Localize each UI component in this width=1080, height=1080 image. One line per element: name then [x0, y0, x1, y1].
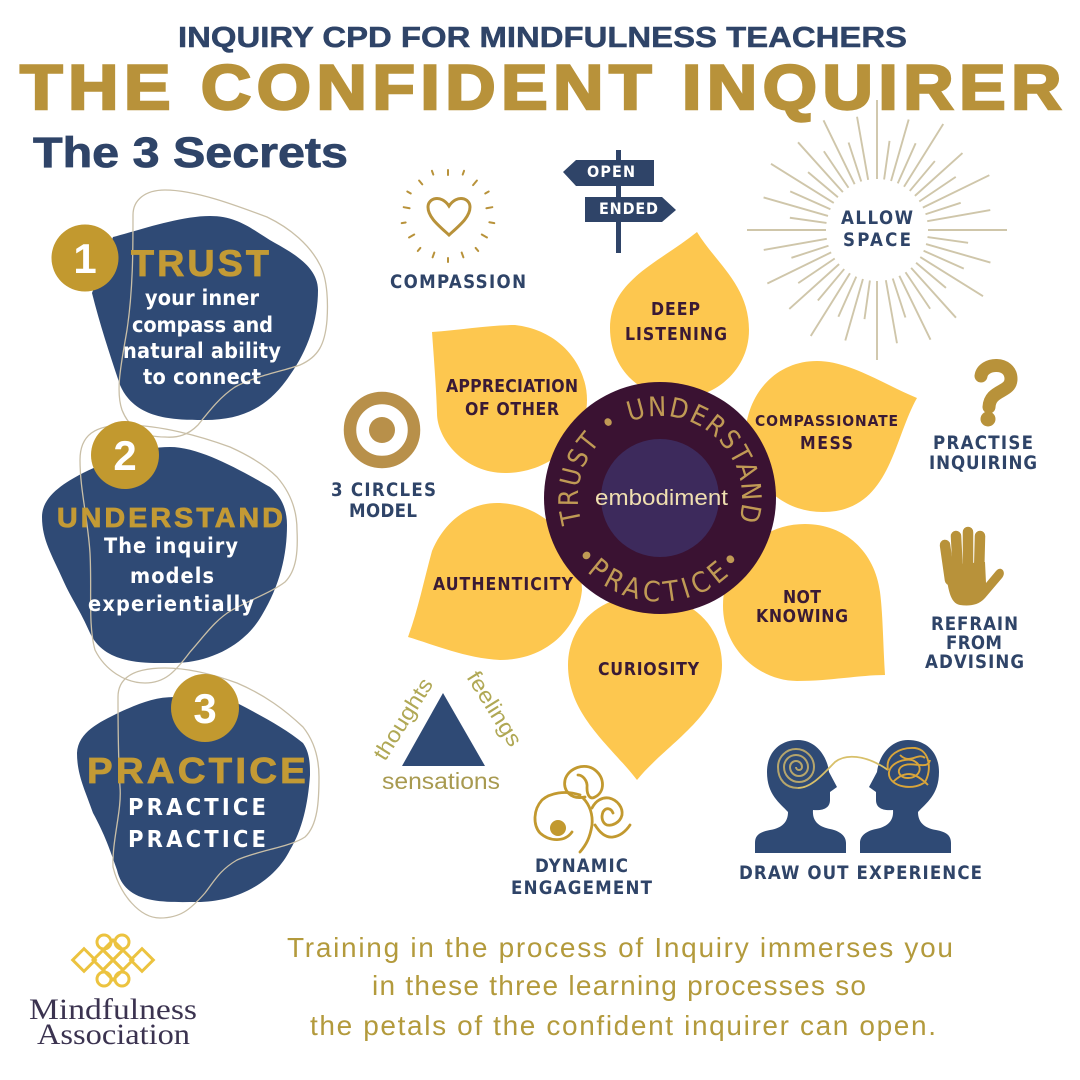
badge 1 — [52, 224, 118, 292]
logo: mindfulness association — [29, 935, 197, 1051]
label: 3 circles model: MODEL — [349, 501, 417, 522]
knot emblem — [73, 935, 153, 986]
blob 1 — [92, 216, 318, 420]
petal labels: AUTHENTICITY — [433, 575, 574, 595]
label: allow space — [841, 208, 913, 251]
ring text: trust understand: TRUST • UNDERSTAND — [558, 396, 762, 526]
label: practise inquiring: PRACTISE — [933, 433, 1033, 454]
label: dynamic engagement: ENGAGEMENT — [511, 878, 653, 899]
understand text: experientially — [88, 592, 254, 617]
label: refrain from advising: REFRAIN — [931, 614, 1018, 635]
understand text — [88, 534, 254, 617]
label: draw out experience: DRAW OUT EXPERIENCE — [739, 863, 982, 884]
icon: hand — [945, 532, 1004, 605]
illustration: two heads — [755, 740, 951, 853]
left head — [755, 740, 846, 853]
trust text — [123, 286, 281, 390]
practice heading: PRACTICE — [87, 750, 309, 791]
label: 3 circles model: 3 CIRCLES — [331, 480, 436, 501]
label: dynamic engagement: DYNAMIC — [535, 856, 628, 877]
badge 2 — [91, 421, 159, 489]
label: practise inquiring: INQUIRING — [929, 453, 1037, 474]
flower diagram — [408, 232, 917, 780]
outline 1 — [119, 190, 327, 437]
triangle model — [368, 666, 527, 794]
word: feelings: feelings — [462, 666, 527, 751]
subtitle heading: INQUIRY CPD FOR MINDFULNESS TEACHERS — [178, 22, 907, 54]
practice text: PRACTICE — [128, 825, 266, 853]
panel: secret 3 practice — [77, 668, 319, 918]
closing statement: Training in the process of Inquiry immerses you — [287, 932, 953, 963]
petal labels: NOT — [783, 588, 821, 608]
icon: dynamic engagement swirl — [535, 766, 630, 852]
closing statement: the petals of the confident inquirer can open. — [310, 1010, 936, 1041]
connecting thread — [798, 757, 888, 788]
icon: three circles target — [350, 398, 414, 462]
label: allow space: ALLOW — [841, 208, 913, 229]
petal labels: DEEP — [651, 300, 700, 320]
closing statement — [287, 932, 953, 1041]
petal: appreciation of other — [432, 325, 587, 473]
icon: open ended signpost — [563, 150, 676, 253]
trust text: compass and — [132, 313, 273, 338]
outline 2 — [80, 425, 297, 683]
icon: compassion heart — [402, 170, 494, 262]
petal labels: OF OTHER — [465, 400, 559, 420]
understand text: models — [130, 564, 214, 589]
petal: deep listening — [610, 232, 749, 398]
trust text: your inner — [145, 286, 259, 311]
panel: secret 2 understand — [42, 421, 297, 683]
word: sensations: sensations — [382, 768, 500, 794]
tangled scribble — [888, 748, 930, 787]
petal labels: CURIOSITY — [598, 660, 700, 680]
understand text: The inquiry — [104, 534, 238, 559]
label: allow space: SPACE — [843, 230, 911, 251]
centre ring — [544, 382, 776, 614]
petal labels: MESS — [800, 434, 853, 454]
centre disc — [601, 439, 719, 557]
label: practise inquiring — [929, 433, 1037, 474]
ring text: practice: •PRACTICE• — [582, 552, 734, 602]
label: compassion: COMPASSION — [390, 272, 526, 293]
petal: curiosity — [568, 595, 722, 780]
practice text: PRACTICE — [128, 793, 266, 821]
label: refrain from advising: ADVISING — [925, 652, 1024, 673]
petal labels: APPRECIATION — [446, 377, 578, 397]
understand heading: UNDERSTAND — [57, 502, 286, 533]
embodiment label: embodiment — [595, 485, 728, 510]
word: thoughts: thoughts — [368, 673, 438, 765]
trust text: to connect — [143, 365, 261, 390]
petal: not knowing — [723, 524, 885, 681]
petal: compassionate mess — [745, 361, 917, 512]
trust text: natural ability — [123, 339, 281, 364]
number 1: 1 — [73, 235, 97, 282]
outline 3 — [113, 668, 319, 918]
petal: authenticity — [408, 503, 582, 660]
right head — [860, 740, 951, 853]
icon: open ended signpost: ENDED — [599, 199, 658, 218]
triangle — [402, 693, 485, 766]
label: refrain from advising — [925, 614, 1024, 673]
blob 3 — [77, 697, 310, 902]
petal labels: COMPASSIONATE — [755, 412, 898, 430]
practice text — [128, 793, 266, 853]
petal labels: LISTENING — [625, 325, 727, 345]
petal labels — [433, 300, 898, 680]
label: 3 circles model — [331, 480, 436, 522]
spiral — [778, 749, 814, 788]
blob 2 — [42, 447, 287, 663]
icon: question mark — [980, 365, 1011, 426]
icon: open ended signpost: OPEN — [587, 162, 635, 181]
badge 3 — [171, 674, 239, 742]
icon: allow space sunburst — [747, 100, 1007, 360]
section heading: the 3 secrets: The 3 Secrets — [33, 129, 348, 177]
label: dynamic engagement — [511, 856, 653, 899]
petal labels: KNOWING — [756, 607, 848, 627]
label: refrain from advising: FROM — [946, 633, 1002, 654]
number 2: 2 — [113, 432, 137, 479]
main title: THE CONFIDENT INQUIRER — [20, 53, 1067, 123]
number 3: 3 — [193, 685, 217, 732]
logo: mindfulness association: Association — [37, 1018, 190, 1051]
panel: secret 1 trust — [52, 190, 327, 437]
logo wordmark: Mindfulness — [29, 993, 197, 1026]
closing statement: in these three learning processes so — [372, 970, 866, 1001]
trust heading: TRUST — [131, 243, 272, 284]
